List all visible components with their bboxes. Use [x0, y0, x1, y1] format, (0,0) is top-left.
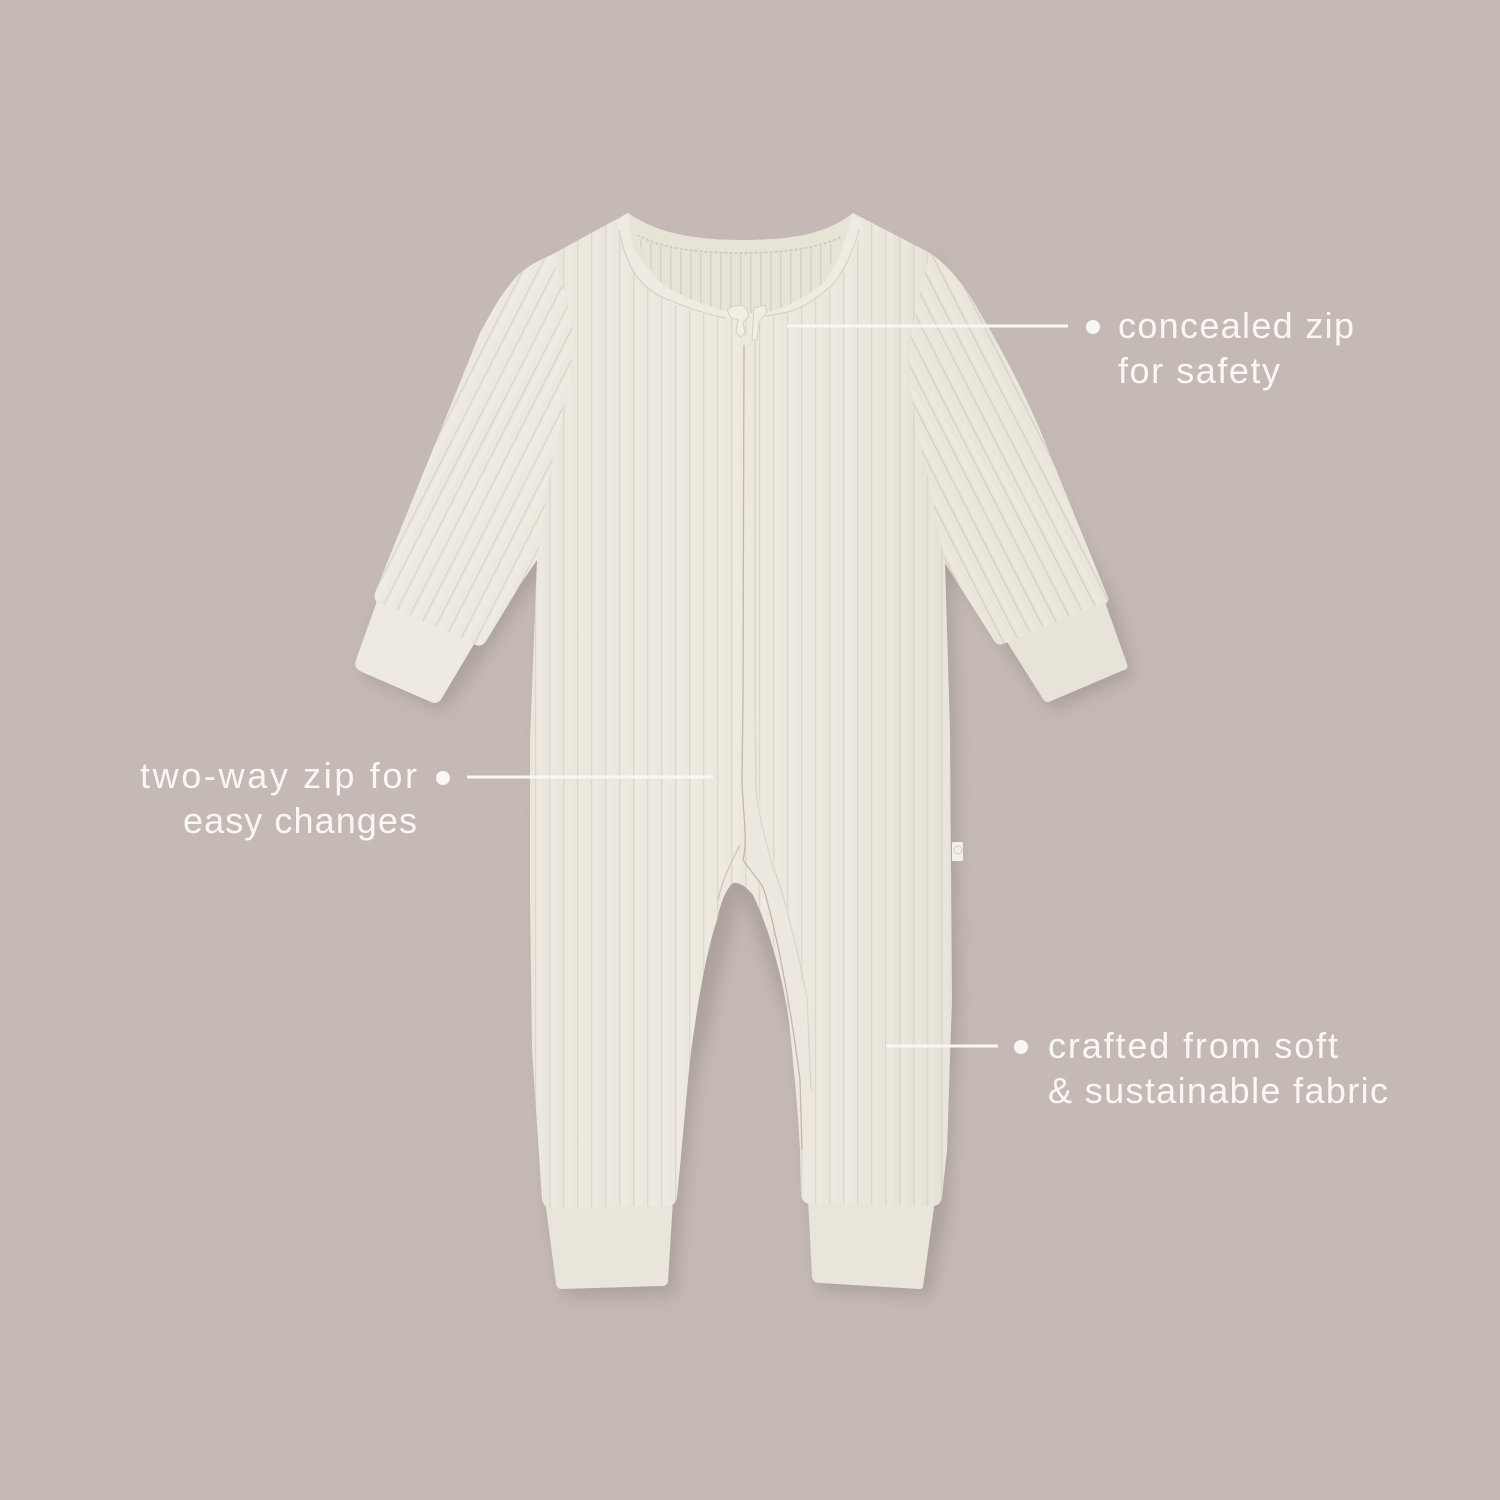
callout: two-way zip: [140, 755, 713, 841]
left cuff: [355, 601, 474, 703]
callout: fabric: [886, 1025, 1388, 1111]
collar band: [617, 213, 863, 320]
right sleeve: [870, 253, 1108, 645]
garment drop shadow: [362, 261, 1134, 1297]
callout: concealed zip: [787, 305, 1354, 391]
left sleeve: [375, 255, 610, 646]
callout: fabric: & sustainable fabric: [1048, 1070, 1388, 1111]
neck opening: [617, 213, 863, 320]
left leg cuff: [545, 1200, 673, 1289]
right cuff: [1007, 602, 1127, 702]
garment illustration: ribbed sleepsuit: [355, 213, 1134, 1297]
callout: two-way zip: two-way zip for: [140, 755, 417, 796]
callout: two-way zip: easy changes: [183, 800, 417, 841]
callout: concealed zip: for safety: [1118, 350, 1280, 391]
callout: fabric: crafted from soft: [1048, 1025, 1338, 1066]
body and legs: [530, 213, 952, 1208]
zip pull: [727, 305, 767, 340]
zip placket: [718, 335, 815, 1150]
callout: concealed zip: concealed zip: [1118, 305, 1354, 346]
brand tag: [952, 842, 963, 861]
right leg cuff: [808, 1200, 935, 1289]
